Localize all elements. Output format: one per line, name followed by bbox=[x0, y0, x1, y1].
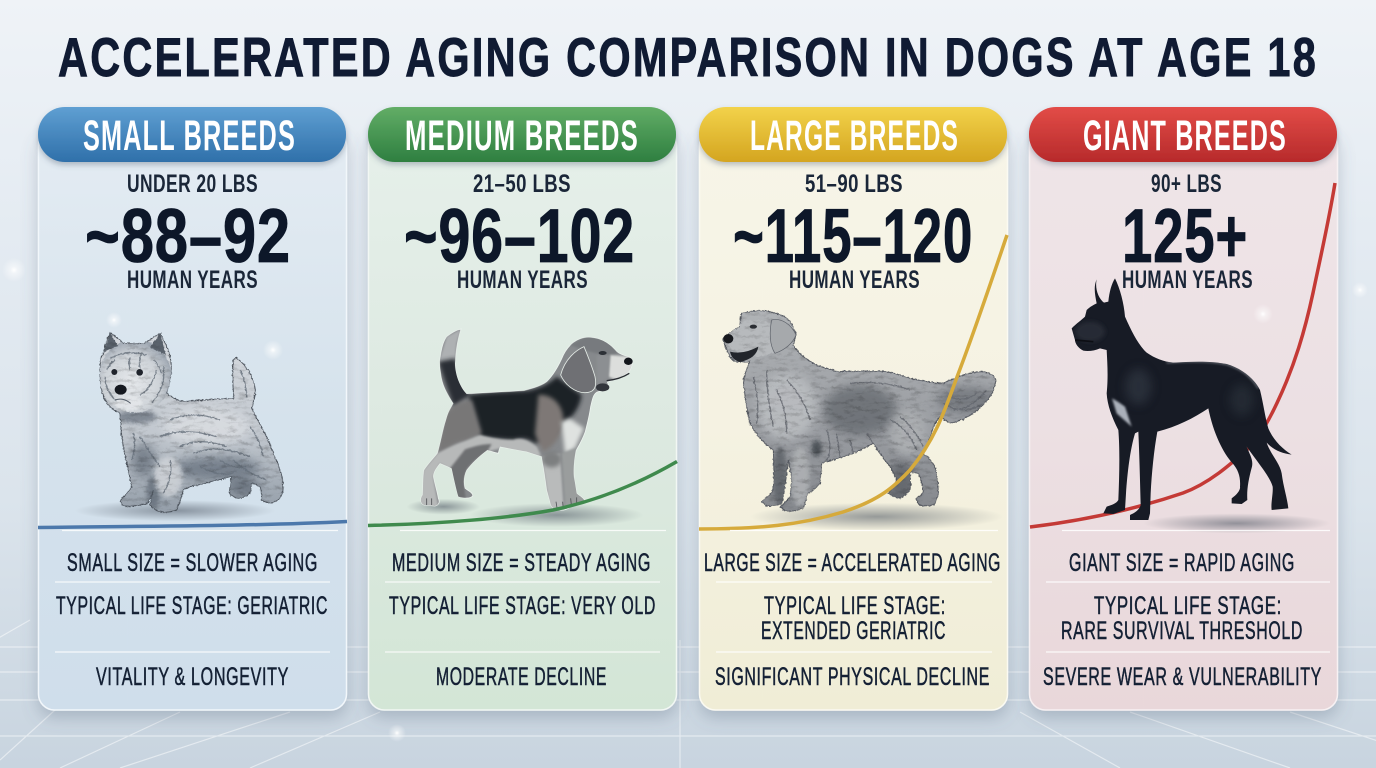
health outcome: SIGNIFICANT PHYSICAL DECLINE bbox=[715, 663, 990, 691]
panel: small breeds bbox=[38, 107, 347, 710]
life stage bbox=[761, 592, 946, 645]
header pill bbox=[38, 107, 346, 162]
icon: golden retriever bbox=[723, 311, 1003, 531]
health outcome: VITALITY & LONGEVITY bbox=[96, 663, 289, 691]
panel: giant breeds bbox=[1029, 107, 1338, 710]
life stage: TYPICAL LIFE STAGE: bbox=[764, 592, 946, 620]
health outcome: MODERATE DECLINE bbox=[436, 663, 607, 691]
weight: 90+ LBS bbox=[1151, 170, 1222, 198]
header pill: MEDIUM BREEDS bbox=[405, 112, 639, 160]
weight: 21–50 LBS bbox=[473, 170, 571, 198]
icon: west highland terrier bbox=[75, 333, 283, 521]
human years label: HUMAN YEARS bbox=[1122, 266, 1253, 294]
aging rate: MEDIUM SIZE = STEADY AGING bbox=[392, 549, 651, 577]
human years number: ~88–92 bbox=[85, 194, 291, 279]
header pill bbox=[368, 107, 676, 162]
human years label: HUMAN YEARS bbox=[127, 266, 258, 294]
human years label: HUMAN YEARS bbox=[457, 266, 588, 294]
human years number: ~96–102 bbox=[404, 194, 635, 279]
weight: 51–90 LBS bbox=[805, 170, 903, 198]
aging rate: SMALL SIZE = SLOWER AGING bbox=[67, 549, 318, 577]
card background bbox=[1030, 130, 1338, 710]
header pill: SMALL BREEDS bbox=[83, 112, 296, 160]
human years label: HUMAN YEARS bbox=[789, 266, 920, 294]
life stage: EXTENDED GERIATRIC bbox=[761, 617, 946, 645]
header pill: LARGE BREEDS bbox=[750, 112, 959, 160]
header pill bbox=[699, 107, 1007, 162]
panel: large breeds bbox=[699, 107, 1008, 710]
life stage bbox=[1061, 592, 1303, 645]
aging rate: LARGE SIZE = ACCELERATED AGING bbox=[704, 549, 1001, 577]
card background bbox=[700, 130, 1008, 710]
icon: great dane bbox=[1072, 278, 1330, 533]
card background bbox=[38, 130, 346, 710]
life stage: TYPICAL LIFE STAGE: VERY OLD bbox=[389, 592, 656, 620]
panel: medium breeds bbox=[368, 107, 677, 710]
aging curve bbox=[38, 522, 347, 528]
card background bbox=[368, 130, 676, 710]
header pill bbox=[1029, 107, 1337, 162]
human years number: ~115–120 bbox=[733, 194, 973, 279]
life stage: TYPICAL LIFE STAGE: GERIATRIC bbox=[56, 592, 328, 620]
weight: UNDER 20 LBS bbox=[127, 170, 258, 198]
aging curve bbox=[699, 235, 1007, 529]
human years number: 125+ bbox=[1122, 194, 1248, 279]
aging curve bbox=[1030, 183, 1335, 527]
icon: beagle bbox=[407, 329, 643, 527]
life stage: TYPICAL LIFE STAGE: bbox=[1094, 592, 1282, 620]
aging curve bbox=[368, 462, 677, 526]
